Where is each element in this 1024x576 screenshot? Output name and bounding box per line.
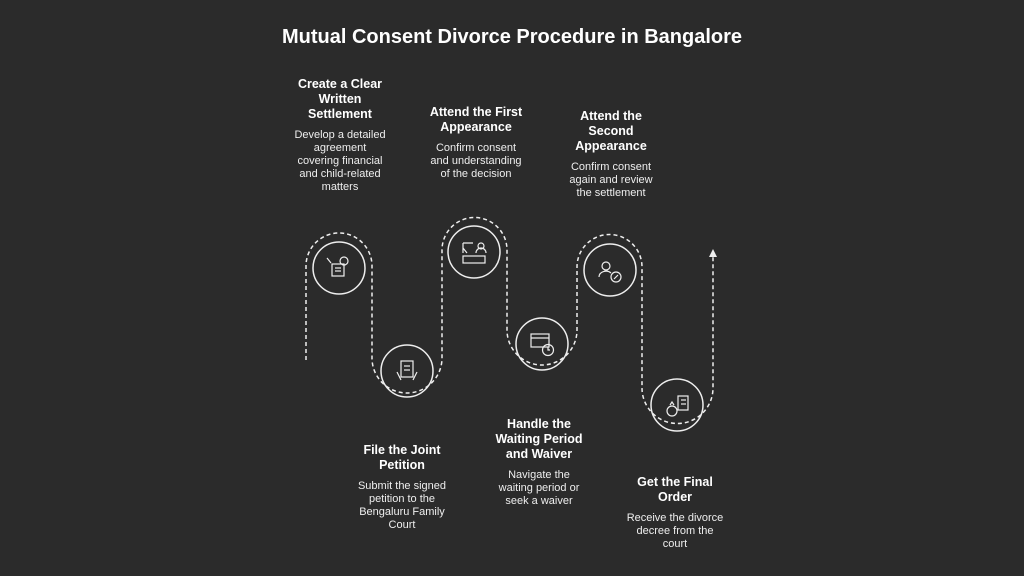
step 1 text: Develop a detailed agreement covering financial and child-related matters bbox=[294, 129, 386, 193]
step 1 text: Create a Clear Written Settlement bbox=[298, 77, 382, 121]
step 2 text bbox=[358, 443, 446, 531]
step 1 text bbox=[294, 77, 386, 193]
step 3 text: Confirm consent and understanding of the decision bbox=[430, 142, 522, 180]
icon circles bbox=[313, 226, 703, 431]
step 3 text bbox=[430, 105, 522, 180]
step 3 text: Attend the First Appearance bbox=[430, 105, 522, 134]
dashed path bbox=[306, 218, 713, 423]
step 2 text: File the Joint Petition bbox=[363, 443, 441, 472]
step 4 text: Navigate the waiting period or seek a waiver bbox=[499, 469, 579, 507]
step 6 text bbox=[627, 475, 723, 550]
icons bbox=[327, 243, 688, 416]
step 4 text bbox=[495, 417, 583, 507]
step 5 text: Confirm consent again and review the settlement bbox=[569, 161, 653, 199]
step 5 text: Attend the Second Appearance bbox=[575, 109, 647, 153]
step 5 text bbox=[569, 109, 653, 199]
step 2 text: Submit the signed petition to the Bengaluru Family Court bbox=[358, 480, 446, 531]
step 6 text: Get the Final Order bbox=[637, 475, 713, 504]
step 6 text: Receive the divorce decree from the court bbox=[627, 512, 723, 550]
arrow head bbox=[709, 249, 717, 257]
step 4 text: Handle the Waiting Period and Waiver bbox=[495, 417, 583, 461]
title: Mutual Consent Divorce Procedure in Bangalore bbox=[282, 26, 742, 48]
